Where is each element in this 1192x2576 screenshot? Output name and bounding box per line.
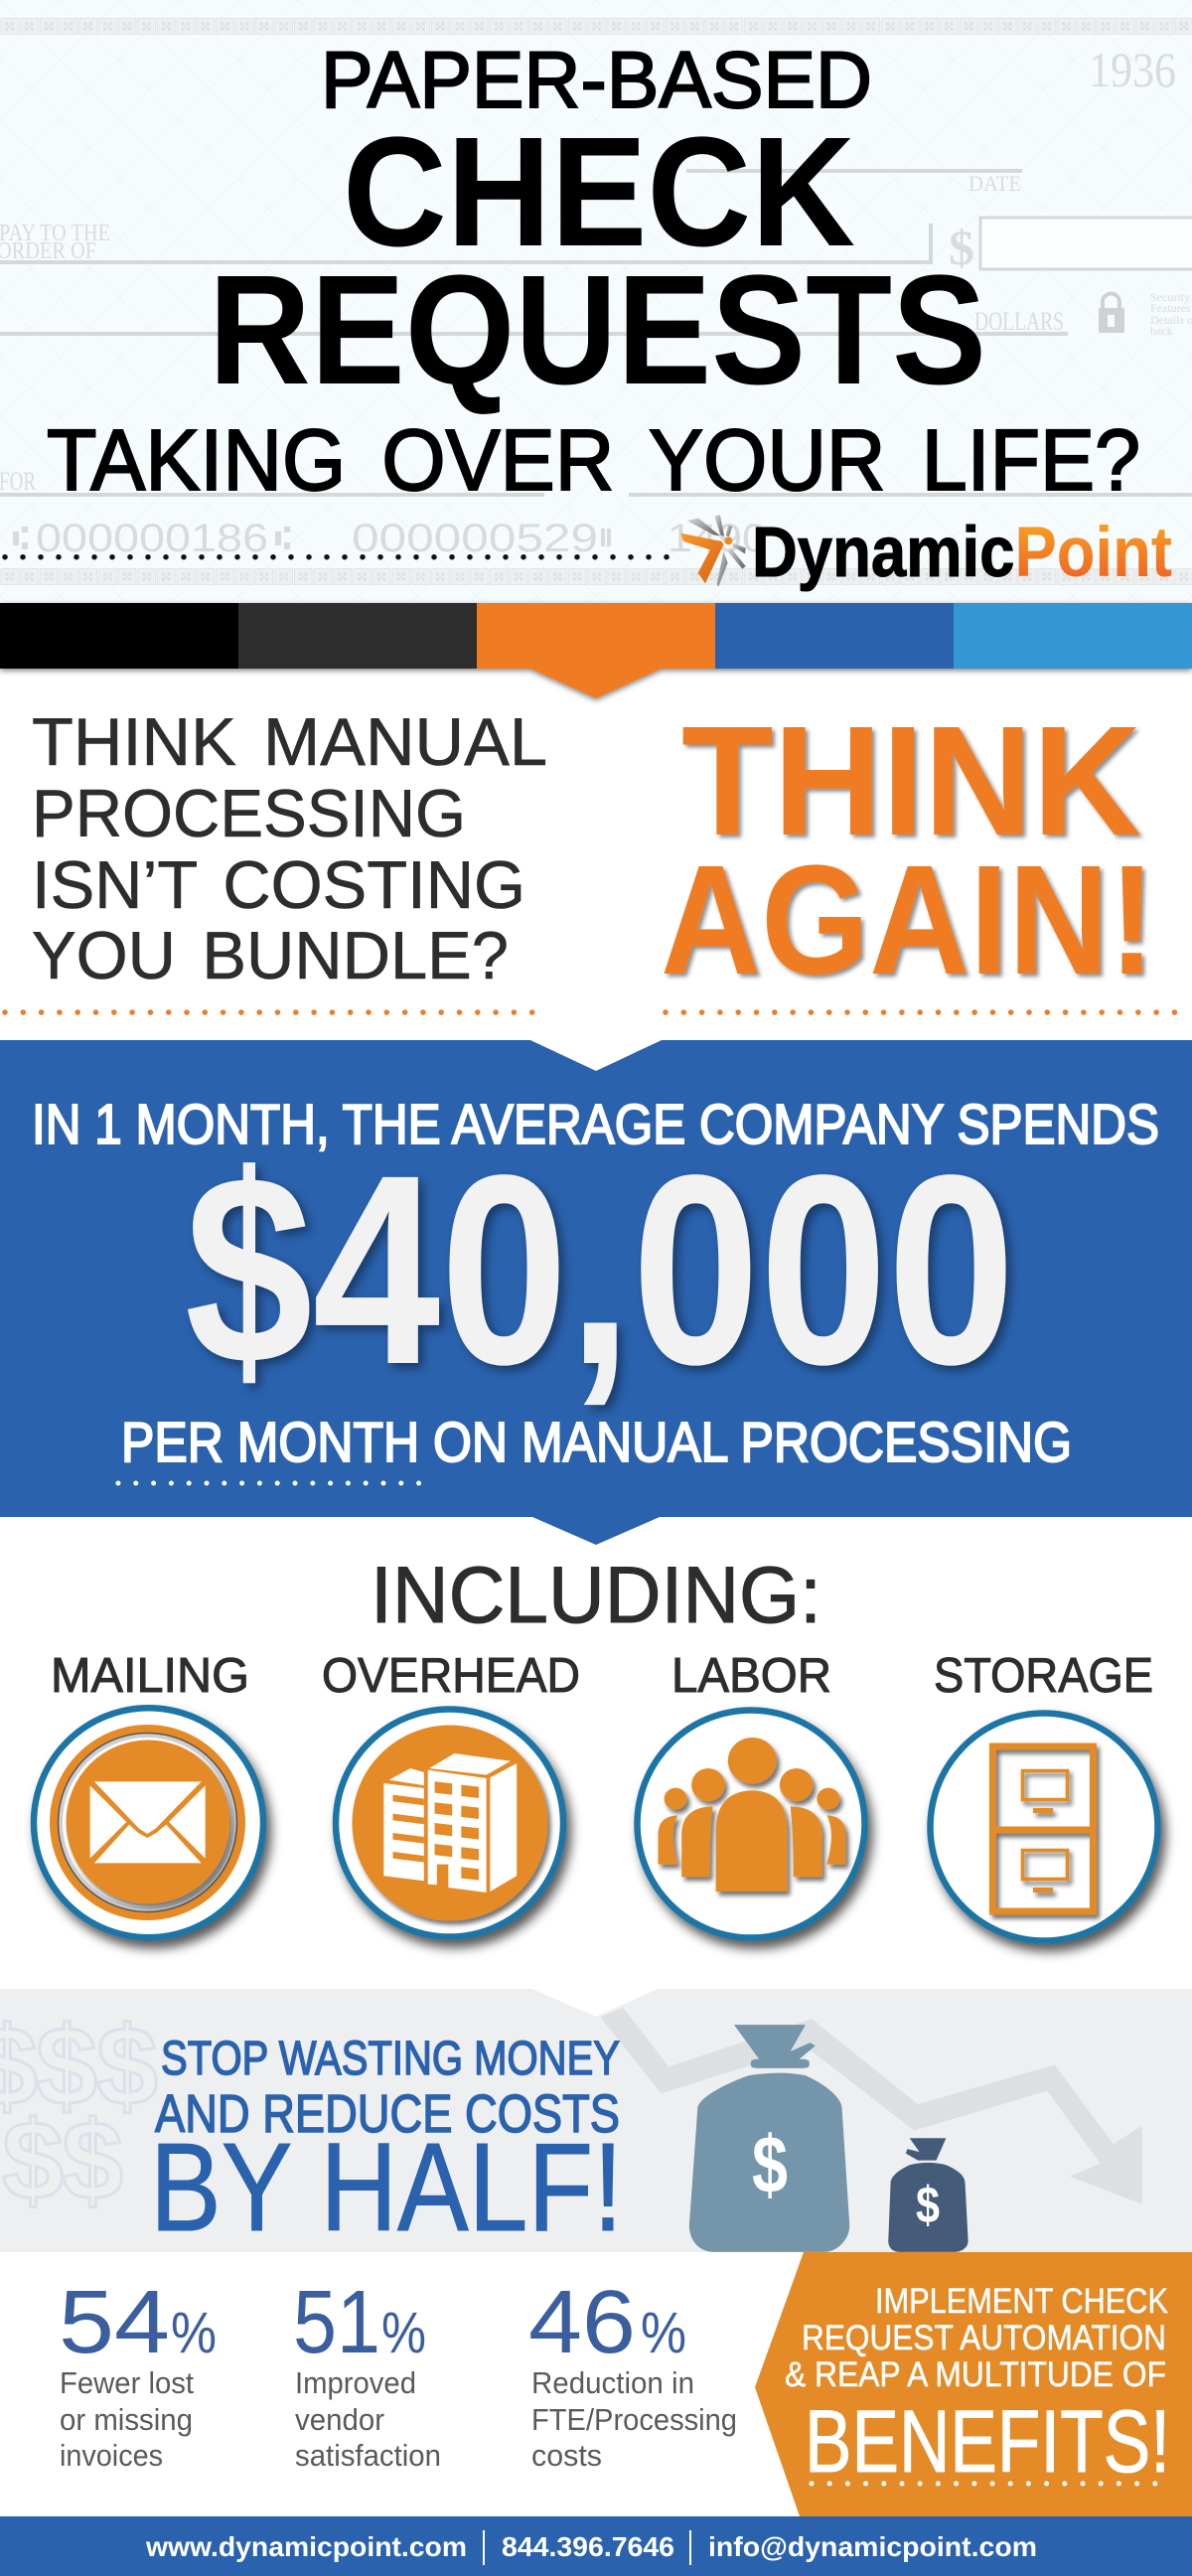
title: paper-based check requests: [47, 36, 1140, 509]
text block: think manual processing: PROCESSING: [32, 776, 466, 851]
text block: think manual processing: THINK MANUAL: [32, 704, 547, 780]
stat: 54 percent: %: [171, 2301, 217, 2365]
heading: including: INCLUDING:: [371, 1551, 821, 1640]
panel: check background header: 1490: [668, 517, 767, 560]
panel: check background header: DATE: [968, 171, 1021, 196]
label: overhead: OVERHEAD: [322, 1649, 580, 1703]
heading: stop wasting: [150, 2033, 623, 2257]
footer: contact bar: info@dynamicpoint.com: [708, 2531, 1037, 2562]
footer: contact bar: [0, 2516, 1192, 2576]
stat: 51 percent: vendor: [295, 2402, 384, 2437]
panel: check background header: PAY TO THE: [0, 221, 110, 246]
dotted line: header: [5, 554, 675, 559]
icon: large money bag: [689, 2025, 849, 2252]
panel: check background header: 1936: [1089, 42, 1176, 97]
icon: faded dollar signs: [0, 2004, 158, 2222]
stat: 54 percent: or missing: [60, 2402, 193, 2437]
icon: large money bag: $: [752, 2120, 788, 2210]
panel: check background header: back: [1150, 324, 1173, 338]
icon: faded dollar signs: $: [96, 2004, 158, 2128]
panel: check background header: [0, 0, 1192, 603]
logo wordmark: DynamicPoint: [752, 514, 1172, 592]
arrow: downward trend: [600, 2008, 1142, 2204]
icon: faded dollar signs: $: [36, 2004, 97, 2128]
icon: mailing envelope: [34, 1708, 263, 1937]
stat: 51 percent: satisfaction: [295, 2438, 441, 2473]
label: labor: LABOR: [671, 1649, 831, 1703]
panel: benefits callout: [755, 2252, 1192, 2516]
panel: check background header: $: [949, 220, 974, 275]
title: paper-based check requests: PAPER-BASED: [321, 36, 872, 125]
stat: 46 percent: FTE/Processing: [531, 2402, 737, 2437]
title: paper-based check requests: TAKING OVER YOUR LIFE?: [47, 412, 1140, 509]
heading: think again: [661, 694, 1155, 1007]
label: storage: STORAGE: [934, 1649, 1153, 1703]
text block: think manual processing: ISN’T COSTING: [32, 847, 525, 923]
icon: faded dollar signs: $: [62, 2098, 123, 2222]
text block: think manual processing: [32, 704, 547, 993]
logo: DynamicPoint: [680, 514, 1172, 592]
stat: 54 percent: [59, 2273, 217, 2473]
panel: check background header: Security: [1150, 290, 1190, 304]
heading: stop wasting: BY HALF!: [150, 2117, 623, 2257]
stat: 51 percent: [293, 2273, 441, 2473]
text block: think manual processing: YOU BUNDLE?: [32, 918, 509, 993]
label: mailing: MAILING: [51, 1649, 249, 1703]
title: paper-based check requests: CHECK: [343, 105, 855, 279]
icon: small money bag: [888, 2138, 968, 2252]
stat: 46 percent: [528, 2273, 737, 2473]
panel: check background header: 000000186: [36, 517, 268, 560]
color bar: [0, 603, 1192, 698]
footer: contact bar: www.dynamicpoint.com: [145, 2531, 467, 2562]
panel: check background header: ORDER OF: [0, 238, 96, 264]
panel: blue cost callout: [0, 1040, 1192, 1545]
stat: 51 percent: %: [381, 2301, 426, 2365]
heading: think again: THINK: [681, 694, 1141, 868]
panel: check background header: 000000529: [352, 517, 598, 560]
stat: 46 percent: %: [641, 2301, 686, 2365]
heading: stop wasting: AND REDUCE COSTS: [155, 2084, 620, 2144]
panel: blue cost callout: PER MONTH ON MANUAL PROCESSING: [121, 1411, 1072, 1474]
stat: 46 percent: costs: [531, 2438, 602, 2473]
panel: check background header: FOR: [0, 467, 36, 496]
stat: 54 percent: invoices: [60, 2438, 163, 2473]
footer: contact bar: 844.396.7646: [502, 2531, 674, 2562]
stat: 54 percent: Fewer lost: [60, 2365, 194, 2400]
stat: 46 percent: 46: [528, 2273, 636, 2372]
icon: small money bag: $: [916, 2177, 940, 2234]
icon: overhead building: [336, 1709, 563, 1937]
stat: 46 percent: Reduction in: [531, 2365, 694, 2400]
panel: check background header: Features: [1150, 301, 1191, 315]
heading: stop wasting: STOP WASTING MONEY: [161, 2033, 620, 2085]
stat: 51 percent: 51: [293, 2273, 380, 2372]
big number: $40,000: [185, 1119, 1015, 1421]
title: paper-based check requests: REQUESTS: [209, 243, 986, 417]
dotted dividers: [5, 1009, 1192, 1015]
stat: 54 percent: 54: [59, 2273, 170, 2372]
panel: stop wasting money: [0, 1989, 1192, 2257]
icon: labor people: [638, 1711, 864, 1937]
stat: 51 percent: Improved: [295, 2365, 416, 2400]
icon: faded dollar signs: $: [2, 2098, 64, 2222]
icon: logo star: [680, 515, 746, 587]
panel: check background header: DOLLARS: [974, 307, 1064, 336]
icon: storage cabinet: [930, 1713, 1158, 1941]
